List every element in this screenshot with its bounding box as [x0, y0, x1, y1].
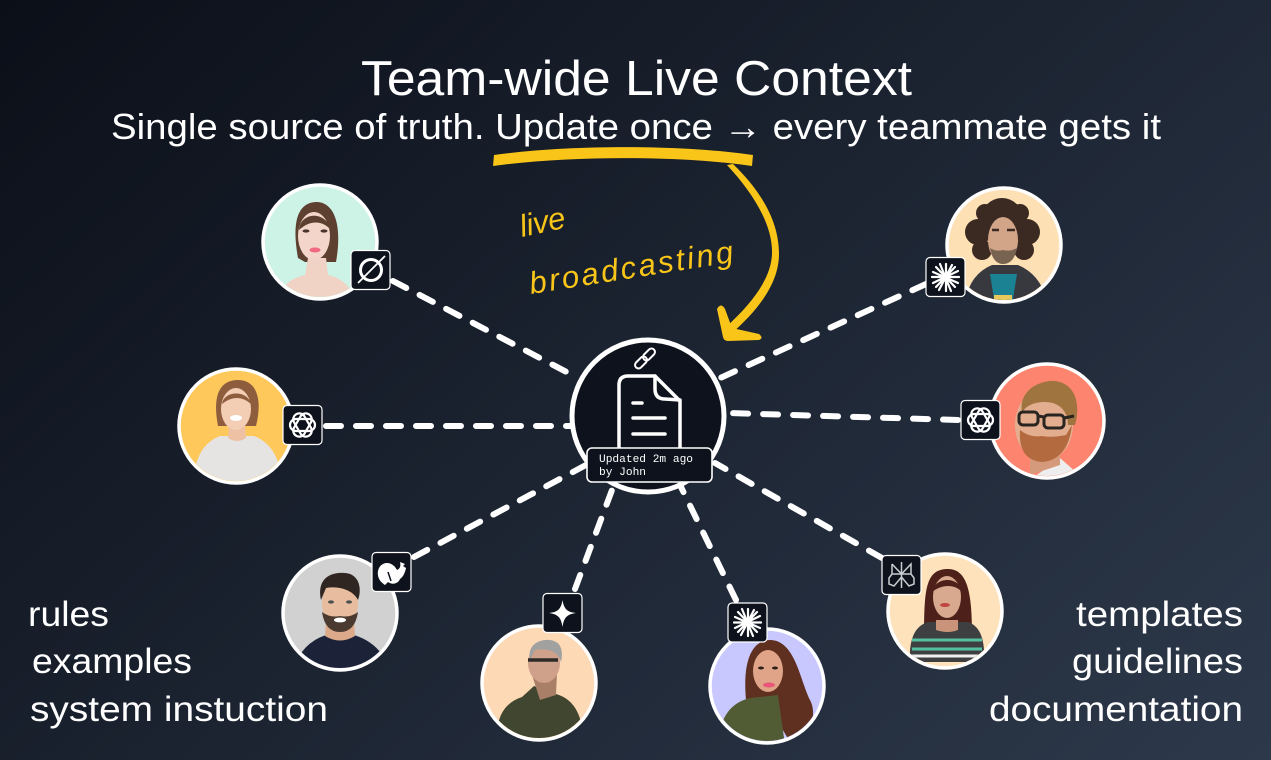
icon: link — [634, 347, 656, 370]
title: Team-wide Live Context — [361, 52, 912, 106]
badge: Perplexity — [882, 556, 921, 594]
handwritten label: broadcasting: broadcasting — [527, 234, 736, 301]
avatar: woman lavender background — [710, 629, 824, 745]
right text block: documentation — [989, 690, 1243, 729]
avatar: woman mint background — [263, 185, 377, 302]
right text block: templates — [1076, 595, 1243, 634]
right text block — [989, 595, 1243, 729]
badge: DeepSeek whale — [372, 552, 411, 592]
status label — [587, 448, 712, 482]
badge: Claude burst bottom — [728, 603, 767, 642]
left text block: examples — [32, 642, 192, 681]
badge: Claude burst top — [926, 258, 965, 296]
subtitle: Single source of truth. Update once → every teammate gets it — [111, 106, 1161, 147]
badge: ChatGPT right — [961, 400, 1000, 440]
left text block: rules — [28, 595, 109, 634]
icon: document — [619, 376, 680, 450]
avatar: older man peach background — [482, 626, 596, 745]
yellow underline — [493, 147, 753, 166]
badge: Gemini sparkle — [543, 594, 582, 632]
avatar: woman cream background — [888, 554, 1002, 668]
right text block: guidelines — [1072, 642, 1243, 681]
status label: Updated 2m ago — [599, 454, 693, 466]
status label: by John — [599, 467, 646, 479]
left text block: system instuction — [30, 690, 328, 729]
avatar: man gray background — [283, 556, 397, 680]
central document node — [572, 340, 724, 492]
dashed connectors — [326, 281, 958, 600]
avatar: man coral background — [990, 364, 1104, 480]
avatar: man curly hair — [947, 188, 1061, 305]
badge: ChatGPT left — [283, 406, 322, 444]
handwritten label: live: live — [516, 200, 568, 244]
yellow curved arrow — [717, 164, 779, 341]
badge: orbit — [351, 250, 390, 290]
avatar: woman yellow background — [179, 369, 293, 490]
left text block — [28, 595, 328, 729]
